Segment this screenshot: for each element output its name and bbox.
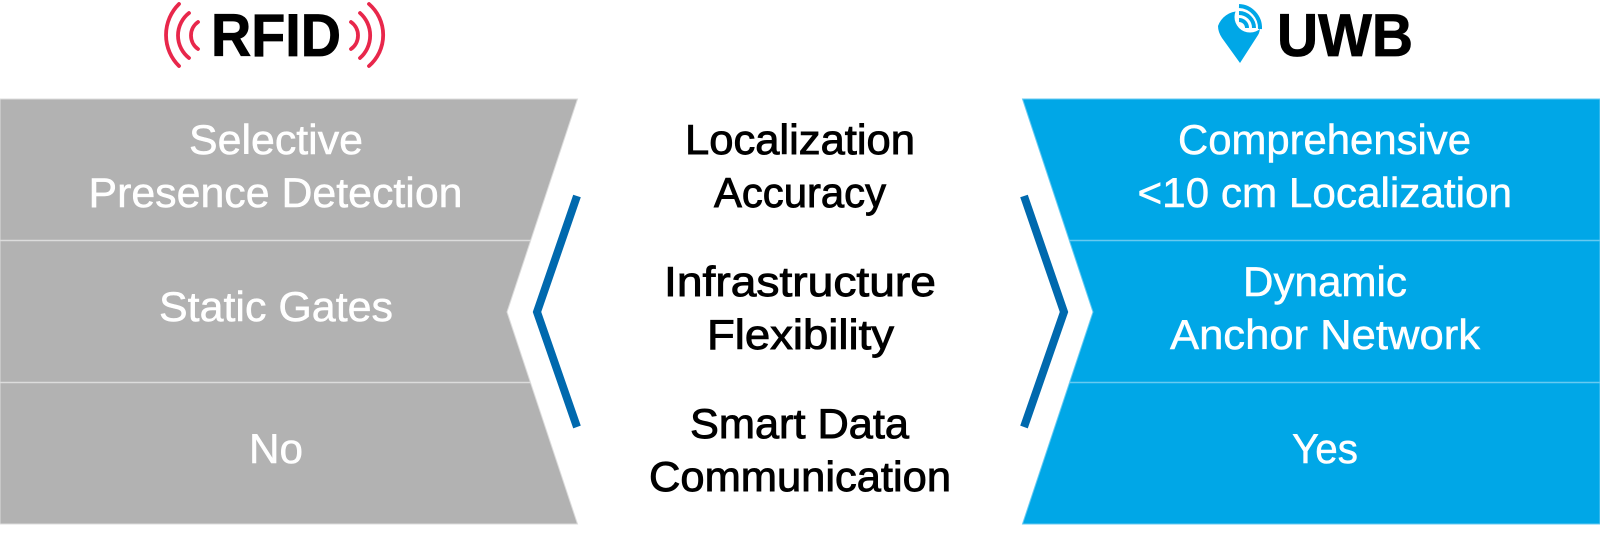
icon: RFID right radio waves — [351, 4, 383, 66]
RFID row 3: data communication: No — [249, 425, 303, 472]
icon: RFID left radio waves — [166, 4, 198, 66]
label: Infrastructure Flexibility: Infrastructure — [664, 258, 936, 305]
UWB row 2: infrastructure — [1170, 258, 1481, 358]
label: Smart Data Communication: Smart Data — [690, 400, 910, 447]
panel background grey — [0, 99, 578, 524]
UWB row 1: accuracy: Comprehensive — [1178, 116, 1471, 163]
UWB logo — [1218, 2, 1413, 69]
label: Localization Accuracy — [685, 116, 915, 216]
UWB row 1: accuracy — [1138, 116, 1512, 216]
label: Localization Accuracy: Accuracy — [714, 169, 886, 216]
arrow: right chevron — [1024, 196, 1064, 427]
label: Infrastructure Flexibility: Flexibility — [707, 311, 894, 358]
UWB row 2: infrastructure: Dynamic — [1243, 258, 1407, 305]
UWB row 2: infrastructure: Anchor Network — [1170, 311, 1481, 358]
label: Infrastructure Flexibility — [664, 258, 936, 358]
RFID row 1: accuracy — [88, 116, 462, 216]
icon: location pin with signal — [1218, 2, 1266, 63]
label: Smart Data Communication — [649, 400, 951, 500]
label: Smart Data Communication: Communication — [649, 453, 951, 500]
UWB row 1: accuracy: <10 cm Localization — [1138, 169, 1512, 216]
RFID logo — [166, 2, 383, 69]
panel: UWB column — [1022, 99, 1600, 524]
RFID row 1: accuracy: Selective — [189, 116, 363, 163]
panel: RFID column — [0, 99, 578, 524]
RFID row 2: infrastructure: Static Gates — [159, 283, 393, 330]
heading: RFID: RFID — [211, 2, 341, 69]
panel background blue — [1022, 99, 1600, 524]
label: Localization Accuracy: Localization — [685, 116, 915, 163]
arrow: left chevron — [537, 196, 577, 427]
UWB row 3: data communication: Yes — [1292, 425, 1358, 472]
heading: UWB: UWB — [1277, 2, 1413, 69]
centre criteria labels — [649, 116, 951, 500]
RFID row 1: accuracy: Presence Detection — [88, 169, 462, 216]
